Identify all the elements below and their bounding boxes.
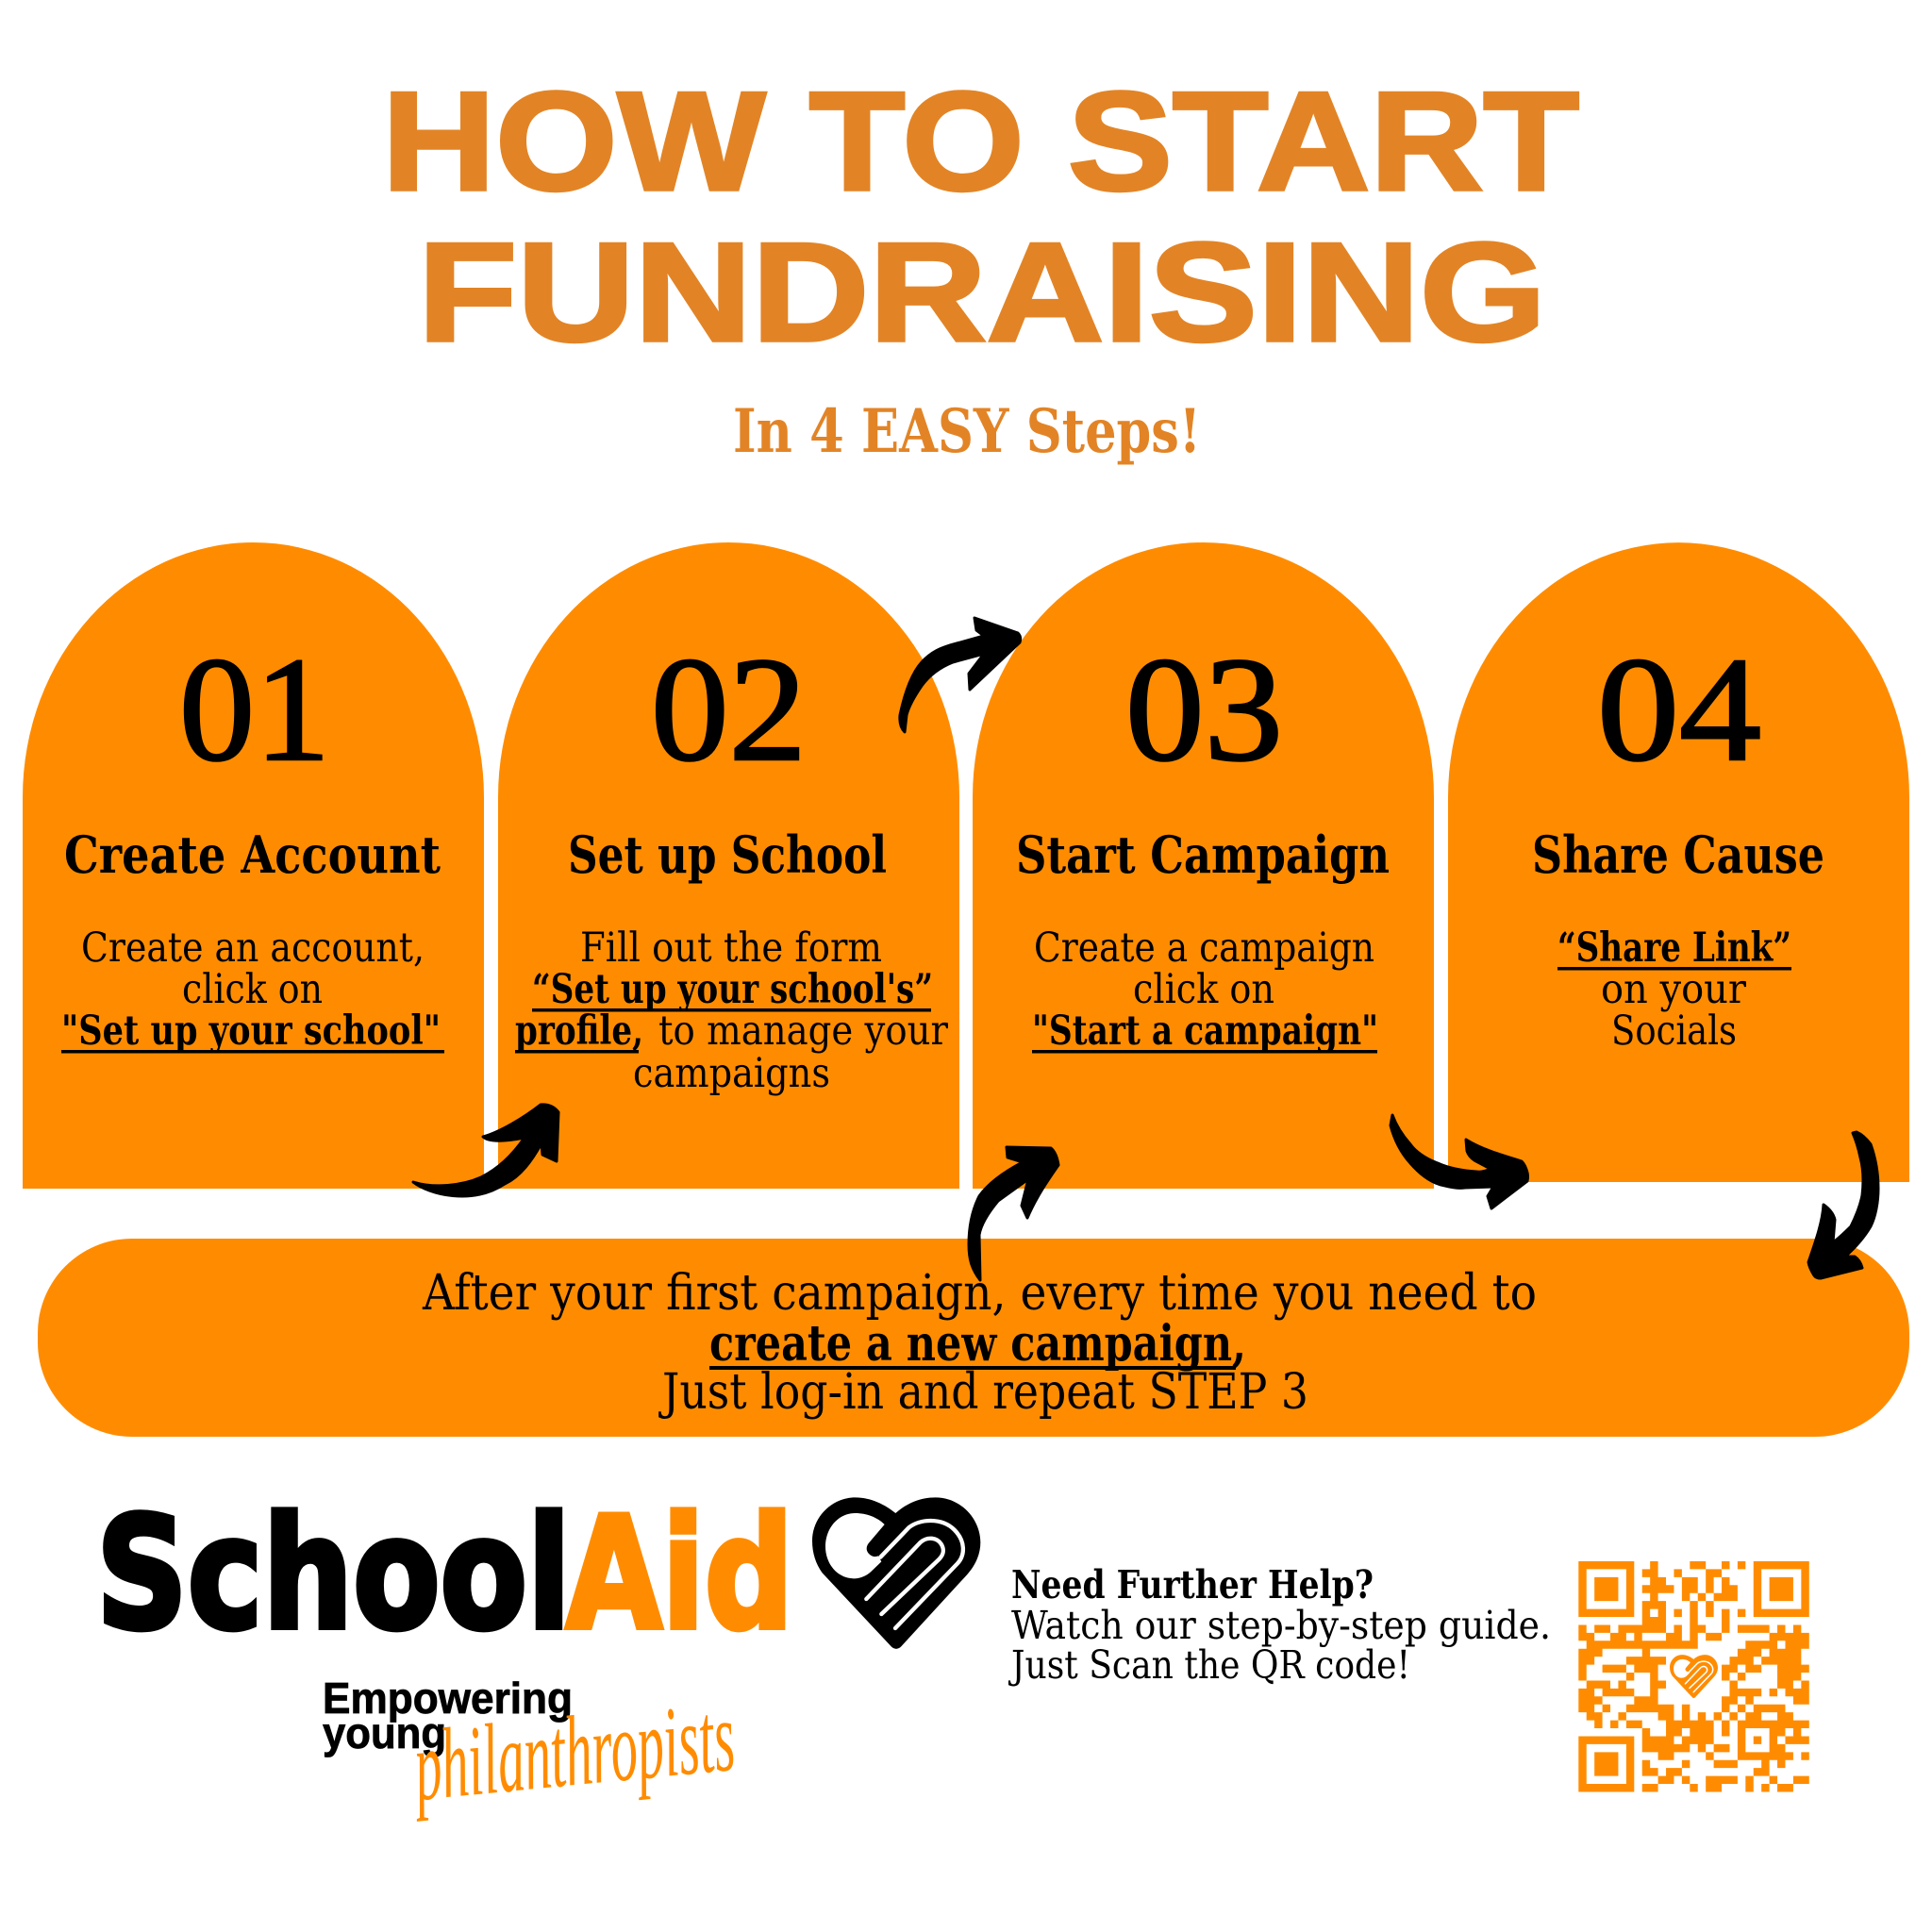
step text: click on — [182, 966, 323, 1013]
step text: Create a campaign — [1034, 924, 1374, 972]
arrow: step 2 to step 3 — [900, 618, 1021, 732]
arrow: step 1 to step 2 — [413, 1105, 558, 1196]
banner text: Just log-in and repeat STEP 3 — [658, 1364, 1308, 1421]
step text: "Set up your school" — [61, 1008, 441, 1055]
panel: repeat banner — [38, 1239, 1909, 1437]
panel: step 2 — [498, 542, 959, 1189]
step text: to manage your — [658, 1008, 948, 1055]
arrow: step 3 to step 4 — [1391, 1115, 1528, 1208]
arrow: step 4 to banner — [1808, 1132, 1878, 1278]
step text: Create an account, — [81, 924, 425, 972]
step text: "Start a campaign" — [1032, 1008, 1378, 1055]
logo tagline: philanthropists — [407, 1681, 740, 1823]
step text — [61, 924, 444, 1055]
step text — [515, 924, 948, 1097]
title: HOW TO START — [382, 62, 1579, 220]
banner text — [422, 1265, 1537, 1421]
logo tagline: young — [323, 1708, 446, 1757]
help text: Watch our step-by-step guide. — [1011, 1603, 1551, 1648]
step text: “Share Link” — [1557, 924, 1791, 972]
subtitle: In 4 EASY Steps! — [733, 396, 1201, 467]
logo tagline: Empowering — [323, 1674, 573, 1723]
step number 03: 03 — [1125, 627, 1283, 792]
banner text: create a new campaign, — [709, 1315, 1246, 1373]
step text: “Set up your school's” — [532, 966, 933, 1013]
step number 04: 04 — [1597, 627, 1761, 792]
step number 01: 01 — [179, 627, 330, 792]
arrow: banner to step 3 — [969, 1147, 1058, 1280]
step text: Socials — [1611, 1008, 1737, 1055]
step number 02: 02 — [651, 627, 807, 792]
banner text: After your first campaign, every time you need to — [422, 1265, 1537, 1322]
title — [382, 62, 1579, 371]
step text — [1032, 924, 1378, 1055]
logo: SchoolAid wordmark: School — [96, 1484, 571, 1664]
panel: step 4 — [1448, 542, 1909, 1182]
panel: step 3 — [973, 542, 1434, 1189]
logo: SchoolAid wordmark: Aid — [566, 1484, 793, 1664]
help text — [1008, 1562, 1551, 1688]
panel: step 1 — [23, 542, 484, 1189]
icon: SchoolAid heart — [812, 1497, 980, 1649]
help text: Need Further Help? — [1011, 1562, 1374, 1607]
step text: campaigns — [633, 1050, 830, 1097]
step heading: Share Cause — [1532, 824, 1824, 885]
step text: click on — [1133, 966, 1274, 1013]
step text: Fill out the form — [580, 924, 882, 972]
title: FUNDRAISING — [418, 213, 1546, 371]
step heading: Start Campaign — [1016, 824, 1390, 885]
help text: Just Scan the QR code! — [1008, 1642, 1410, 1688]
step heading: Create Account — [64, 824, 441, 885]
QR code — [1578, 1561, 1809, 1791]
step text: on your — [1601, 966, 1746, 1013]
step text: profile, — [515, 1008, 643, 1055]
icon: QR centre heart — [1670, 1655, 1718, 1698]
step text — [1557, 924, 1791, 1055]
step heading: Set up School — [568, 824, 887, 885]
